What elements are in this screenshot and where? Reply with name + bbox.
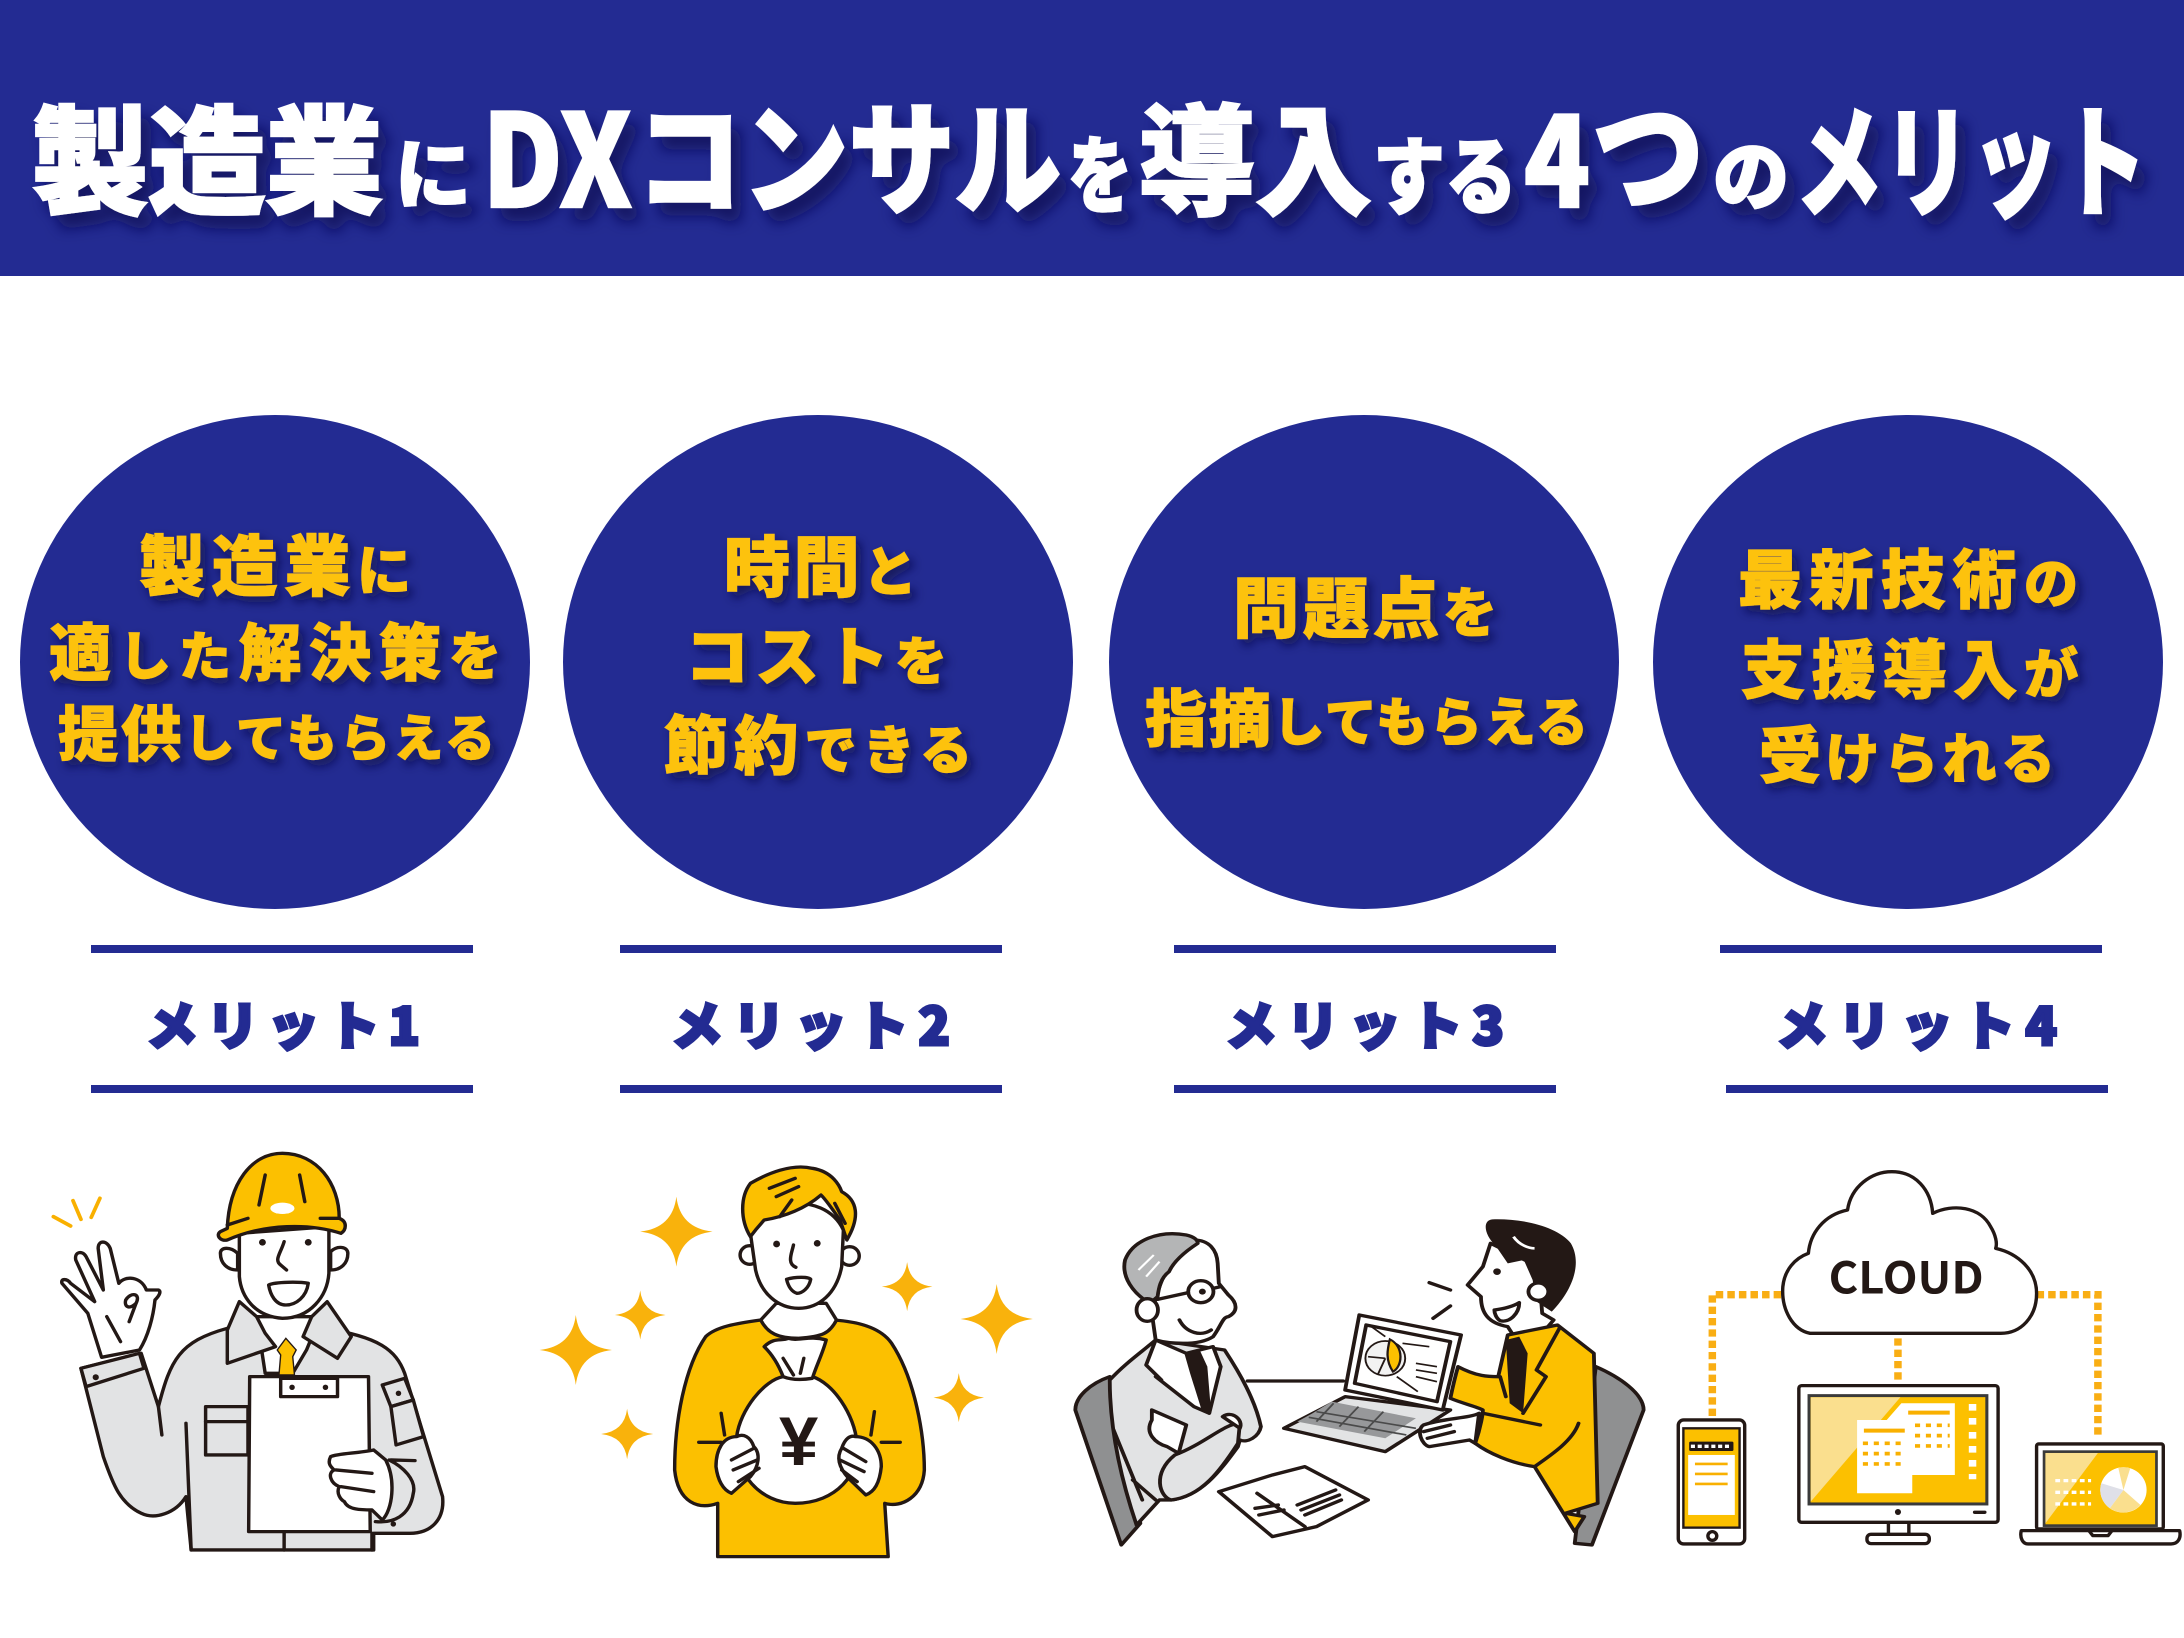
label: merit 3	[1174, 945, 1556, 1093]
circle text 4	[1738, 530, 2078, 796]
label: merit 2: メリット2	[671, 985, 950, 1060]
circle text 1	[49, 514, 501, 774]
circle text 3: 問題点を	[1233, 556, 1497, 652]
title: DX	[482, 59, 632, 244]
label: merit 3: メリット3	[1225, 985, 1504, 1060]
cloud label: CLOUD	[1829, 1242, 1984, 1306]
title: に	[395, 114, 471, 224]
title: 導入	[1138, 66, 1372, 240]
illustration: two businessmen meeting over a laptop	[1075, 1219, 1644, 1545]
title: を	[1068, 110, 1132, 231]
header band	[0, 0, 2184, 276]
circle text 3: 指摘してもらえる	[1145, 669, 1588, 759]
illustration: worker with helmet and clipboard	[53, 1153, 443, 1550]
circle text 2: 時間と	[724, 515, 917, 611]
circle text 4: 受けられる	[1759, 706, 2055, 796]
laptop	[2021, 1444, 2180, 1544]
sparkles	[540, 1197, 1033, 1459]
label: merit 2	[620, 945, 1002, 1093]
cloud	[1783, 1172, 2037, 1333]
circle text 2	[664, 515, 972, 788]
title: 4	[1524, 63, 1590, 243]
title	[31, 53, 2147, 244]
monitor	[1799, 1386, 1998, 1544]
label: merit 1	[91, 945, 473, 1093]
label: merit 4: メリット4	[1776, 985, 2057, 1060]
panel: merit 1 circle	[20, 415, 530, 909]
circle text 4: 最新技術の	[1738, 530, 2078, 622]
circle text 4: 支援導入が	[1741, 620, 2078, 712]
panel: merit 3 circle	[1109, 415, 1619, 909]
title: する	[1373, 111, 1517, 232]
illustration: cloud connected to phone, monitor and laptop	[1678, 1172, 2180, 1544]
label: merit 1: メリット1	[146, 985, 420, 1060]
circle text 2: 節約できる	[664, 696, 972, 788]
panel: merit 4 circle	[1653, 415, 2163, 909]
label: merit 4	[1720, 945, 2108, 1093]
dotted connectors	[1712, 1295, 2098, 1438]
title: つ	[1592, 53, 1704, 241]
circle text 1: 製造業に	[139, 514, 411, 610]
title: 製造業	[31, 68, 383, 239]
circle text 3	[1145, 556, 1588, 759]
circle text 1: 提供してもらえる	[58, 687, 495, 774]
yen symbol: ¥	[779, 1403, 819, 1480]
panel: merit 2 circle	[563, 415, 1073, 909]
circle text 2: コストを	[685, 607, 947, 699]
phone	[1678, 1420, 1745, 1544]
illustration: man holding yen money bag with sparkles	[540, 1167, 1033, 1557]
title: の	[1713, 116, 1789, 226]
circle text 1: 適した解決策を	[49, 603, 501, 693]
title: コンサル	[636, 63, 1061, 240]
